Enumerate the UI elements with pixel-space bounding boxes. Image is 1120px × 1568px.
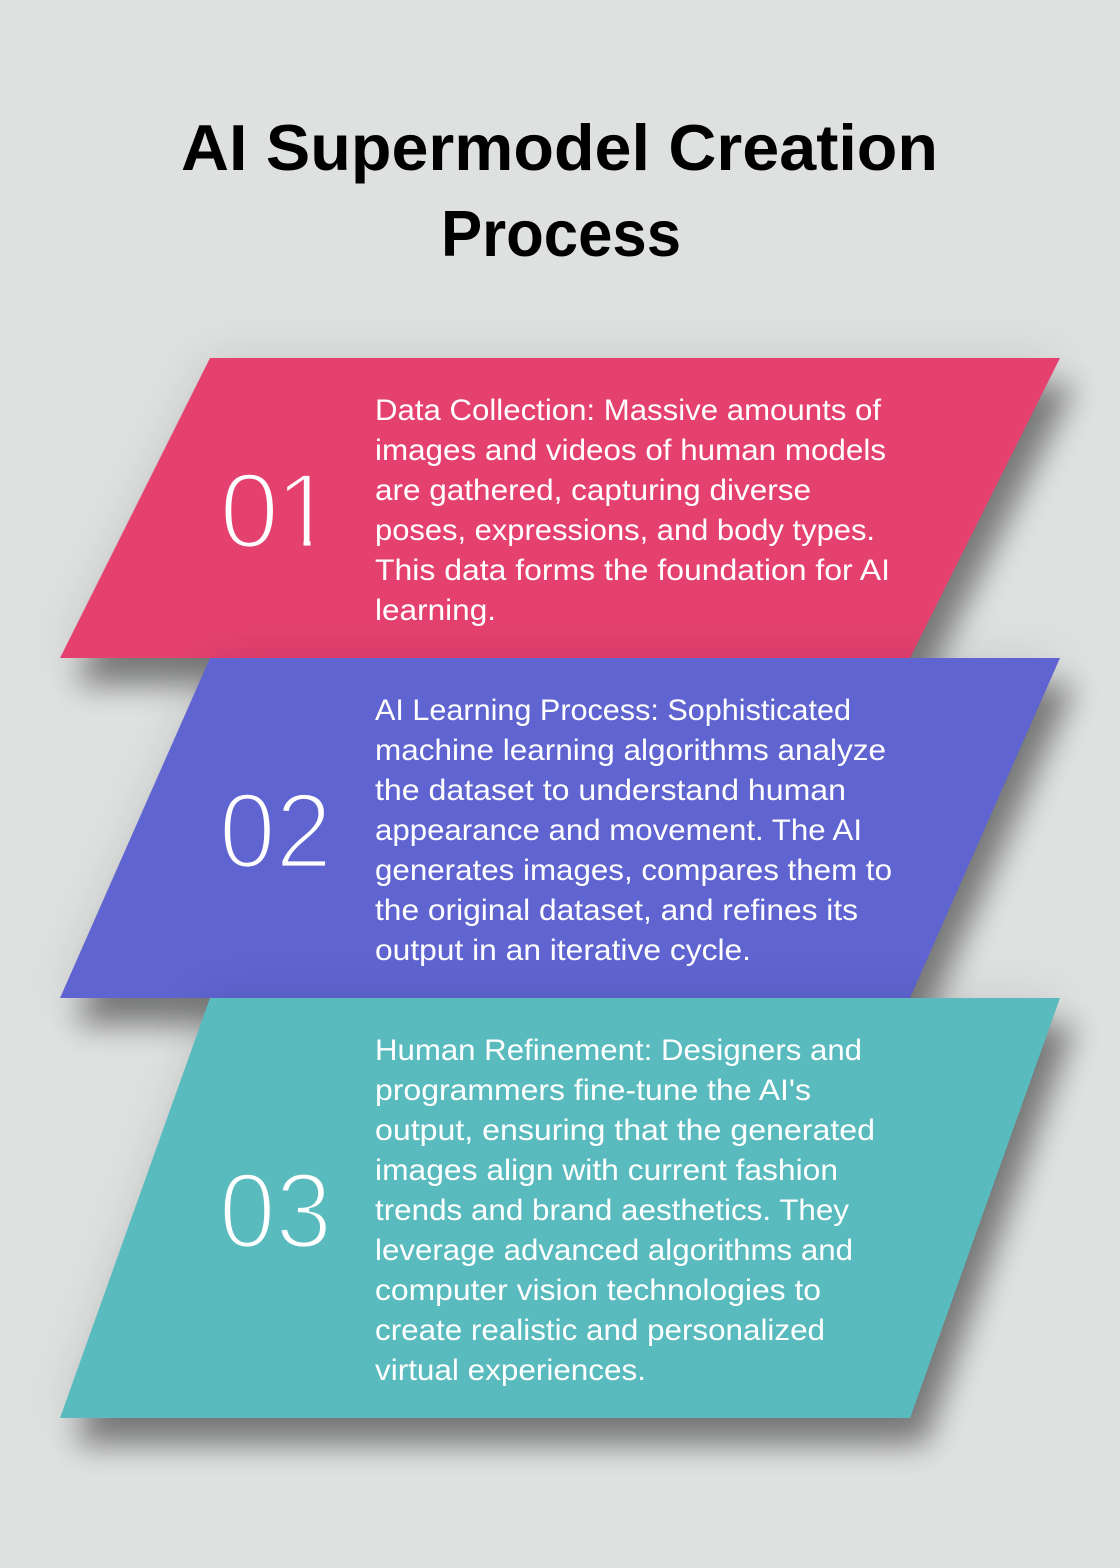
step 03 text: images align with current fashion	[375, 1154, 838, 1187]
step 03 text: virtual experiences.	[375, 1354, 646, 1387]
step 02 text: the original dataset, and refines its	[375, 894, 858, 927]
step 02 text: the dataset to understand human	[375, 774, 846, 807]
panel: step 03 human refinement	[60, 998, 1060, 1418]
step 02 text: AI Learning Process: Sophisticated	[375, 694, 851, 727]
step 02 text: output in an iterative cycle.	[375, 934, 751, 967]
step 03 number: 03	[219, 1150, 332, 1270]
title	[181, 111, 938, 270]
step 02 background shape	[60, 658, 1060, 998]
step 02 text	[375, 694, 892, 967]
step 03 background shape	[60, 998, 1060, 1418]
step 01 text: Data Collection: Massive amounts of	[375, 394, 882, 427]
step 01 text: poses, expressions, and body types.	[375, 514, 875, 547]
step 01 text	[375, 394, 890, 627]
step 02 text: appearance and movement. The AI	[375, 814, 862, 847]
step 03 text: leverage advanced algorithms and	[375, 1234, 853, 1267]
step 03 text: computer vision technologies to	[375, 1274, 821, 1307]
step 03 text: programmers fine-tune the AI's	[375, 1074, 811, 1107]
step 03 text: Human Refinement: Designers and	[375, 1034, 862, 1067]
panel: step 02 AI learning process	[60, 658, 1060, 998]
step 03 text: create realistic and personalized	[375, 1314, 825, 1347]
step 01 background shape	[60, 358, 1060, 658]
step 03 text	[375, 1034, 875, 1387]
step 01 number: 01	[220, 450, 335, 570]
step 01 text: This data forms the foundation for AI	[375, 554, 890, 587]
step 02 text: machine learning algorithms analyze	[375, 734, 886, 767]
step 03 text: trends and brand aesthetics. They	[375, 1194, 849, 1227]
step 01 text: images and videos of human models	[375, 434, 886, 467]
title: Process	[441, 197, 681, 270]
step 02 text: generates images, compares them to	[375, 854, 892, 887]
panel: step 01 data collection	[60, 358, 1060, 658]
step 03 text: output, ensuring that the generated	[375, 1114, 875, 1147]
step 02 number: 02	[219, 770, 332, 890]
title: AI Supermodel Creation	[181, 111, 938, 184]
step 01 text: are gathered, capturing diverse	[375, 474, 811, 507]
step 01 text: learning.	[375, 594, 496, 627]
